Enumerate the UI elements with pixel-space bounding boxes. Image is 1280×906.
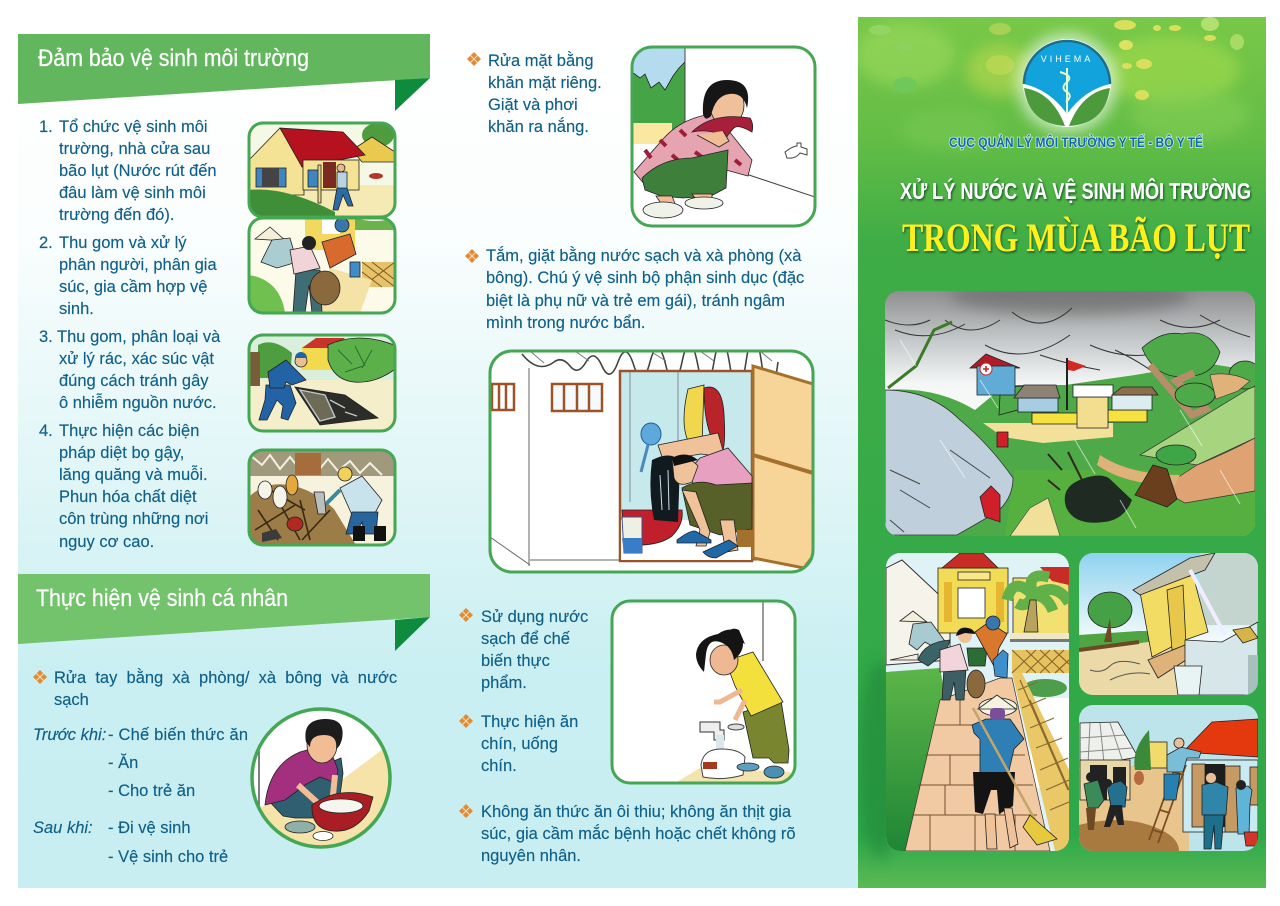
numbered list: súc, gia cầm hợp vệ — [59, 278, 207, 296]
numbered list: đúng cách tránh gây — [59, 372, 209, 390]
icon: bullet diamond — [33, 670, 47, 684]
panel: middle column — [459, 46, 816, 865]
text: department name: CỤC QUẢN LÝ MÔI TRƯỜNG Y TẾ - BỘ Y TẾ — [949, 135, 1203, 150]
illustration: woman at tap — [612, 601, 795, 783]
illustration: well and yellow house — [1079, 553, 1258, 695]
text: clean water and cooked food — [459, 608, 588, 775]
numbered list: trường đến đó). — [59, 206, 174, 224]
text: bathing — [465, 246, 804, 332]
numbered list: bão lụt (Nước rút đến — [59, 162, 217, 180]
handwashing text: sạch — [54, 691, 89, 709]
text: clean water and cooked food: sạch để chế — [481, 630, 570, 648]
handwashing text: Sau khi: — [33, 819, 93, 837]
illustration: woman washing face — [632, 47, 815, 226]
text: bathing: mình trong nước bẩn. — [486, 314, 645, 332]
numbered list: nguy cơ cao. — [59, 533, 154, 551]
illustration: boy washing hands — [250, 709, 395, 850]
numbered list: 2. — [39, 234, 53, 252]
handwashing text: Rửa tay bằng xà phòng/ xà bông và nước — [54, 668, 397, 687]
illustration: clean house — [249, 123, 395, 217]
banner: personal hygiene: Thực hiện vệ sinh cá nhân — [36, 585, 288, 612]
panel: green cover — [855, 17, 1266, 888]
numbered list: xử lý rác, xác súc vật — [59, 350, 214, 368]
text: bathing: biệt là phụ nữ và trẻ em gái), tránh ngâm — [486, 292, 785, 310]
panel: environmental hygiene section — [18, 34, 430, 551]
text: wash face — [467, 51, 602, 136]
panel: personal hygiene section — [18, 574, 430, 866]
numbered list: Phun hóa chất diệt — [59, 488, 197, 506]
text: food safety: súc, gia cầm mắc bệnh hoặc chết không rõ — [481, 824, 796, 843]
text: wash face: Rửa mặt bằng — [488, 51, 594, 70]
text: bathing: bông). Chú ý vệ sinh bộ phận sinh dục (đặc — [486, 269, 804, 287]
numbered list: Tổ chức vệ sinh môi — [59, 118, 208, 136]
text: wash face: Giặt và phơi — [488, 96, 578, 114]
illustration: storm scene — [885, 278, 1261, 536]
text: wash face: khăn ra nắng. — [488, 117, 589, 136]
numbered list: trường, nhà cửa sau — [59, 140, 210, 158]
text: food safety — [459, 803, 796, 865]
numbered list: Thu gom và xử lý — [59, 234, 187, 252]
text: clean water and cooked food: chín, uống — [481, 735, 558, 753]
illustration: village cleanup — [886, 553, 1069, 851]
panel: pale inner background — [18, 35, 860, 888]
numbered list: pháp diệt bọ gậy, — [59, 444, 184, 462]
numbered list — [39, 118, 221, 551]
numbered list: ô nhiễm nguồn nước. — [59, 393, 217, 412]
numbered list: phân người, phân gia — [59, 256, 217, 274]
numbered list: đâu làm vệ sinh môi — [59, 184, 206, 202]
text: clean water and cooked food: phẩm. — [481, 674, 527, 692]
numbered list: lăng quăng và muỗi. — [59, 465, 208, 484]
text: food safety: Không ăn thức ăn ôi thiu; không ăn thịt gia — [481, 803, 792, 821]
text: food safety: nguyên nhân. — [481, 847, 581, 865]
numbered list: côn trùng những nơi — [59, 510, 208, 528]
numbered list: sinh. — [59, 300, 94, 318]
handwashing text: - Ăn — [108, 753, 138, 772]
handwashing text: - Vệ sinh cho trẻ — [108, 848, 228, 866]
icon: bullet diamond — [459, 804, 473, 818]
text: wash face: khăn mặt riêng. — [488, 74, 602, 92]
illustration: repairing houses — [1079, 705, 1258, 851]
logo: VIHEMA: VIHEMA — [1041, 54, 1093, 64]
illustration: waste collection — [249, 218, 395, 313]
numbered list: 1. — [39, 118, 53, 136]
handwashing text: - Cho trẻ ăn — [108, 782, 195, 800]
banner: personal hygiene — [18, 574, 430, 651]
numbered list: 4. — [39, 422, 53, 440]
handwashing text: - Chế biến thức ăn — [108, 726, 248, 744]
numbered list: Thực hiện các biện — [59, 422, 199, 440]
handwashing text: Trước khi: — [33, 726, 106, 744]
banner: environmental hygiene — [18, 34, 430, 111]
illustration: garbage pit — [249, 335, 395, 431]
text: clean water and cooked food: Sử dụng nước — [481, 608, 588, 626]
text: clean water and cooked food: biến thực — [481, 652, 550, 670]
handwashing text — [33, 668, 397, 866]
icon: bullet diamond — [459, 714, 473, 728]
text: bathing: Tắm, giặt bằng nước sạch và xà phòng (xà — [486, 246, 802, 265]
numbered list: 3. Thu gom, phân loại và — [39, 328, 221, 346]
illustration: spraying insecticide — [249, 450, 395, 545]
logo: VIHEMA — [1017, 33, 1117, 133]
icon: bullet diamond — [467, 52, 481, 66]
banner: environmental hygiene: Đảm bảo vệ sinh môi trường — [38, 45, 309, 72]
text: clean water and cooked food: Thực hiện ăn — [481, 713, 578, 731]
icon: bullet diamond — [465, 249, 479, 263]
handwashing text: - Đi vệ sinh — [108, 819, 191, 837]
icon: bullet diamond — [459, 608, 473, 622]
text: clean water and cooked food: chín. — [481, 757, 517, 775]
illustration: woman bathing at door — [488, 350, 814, 574]
